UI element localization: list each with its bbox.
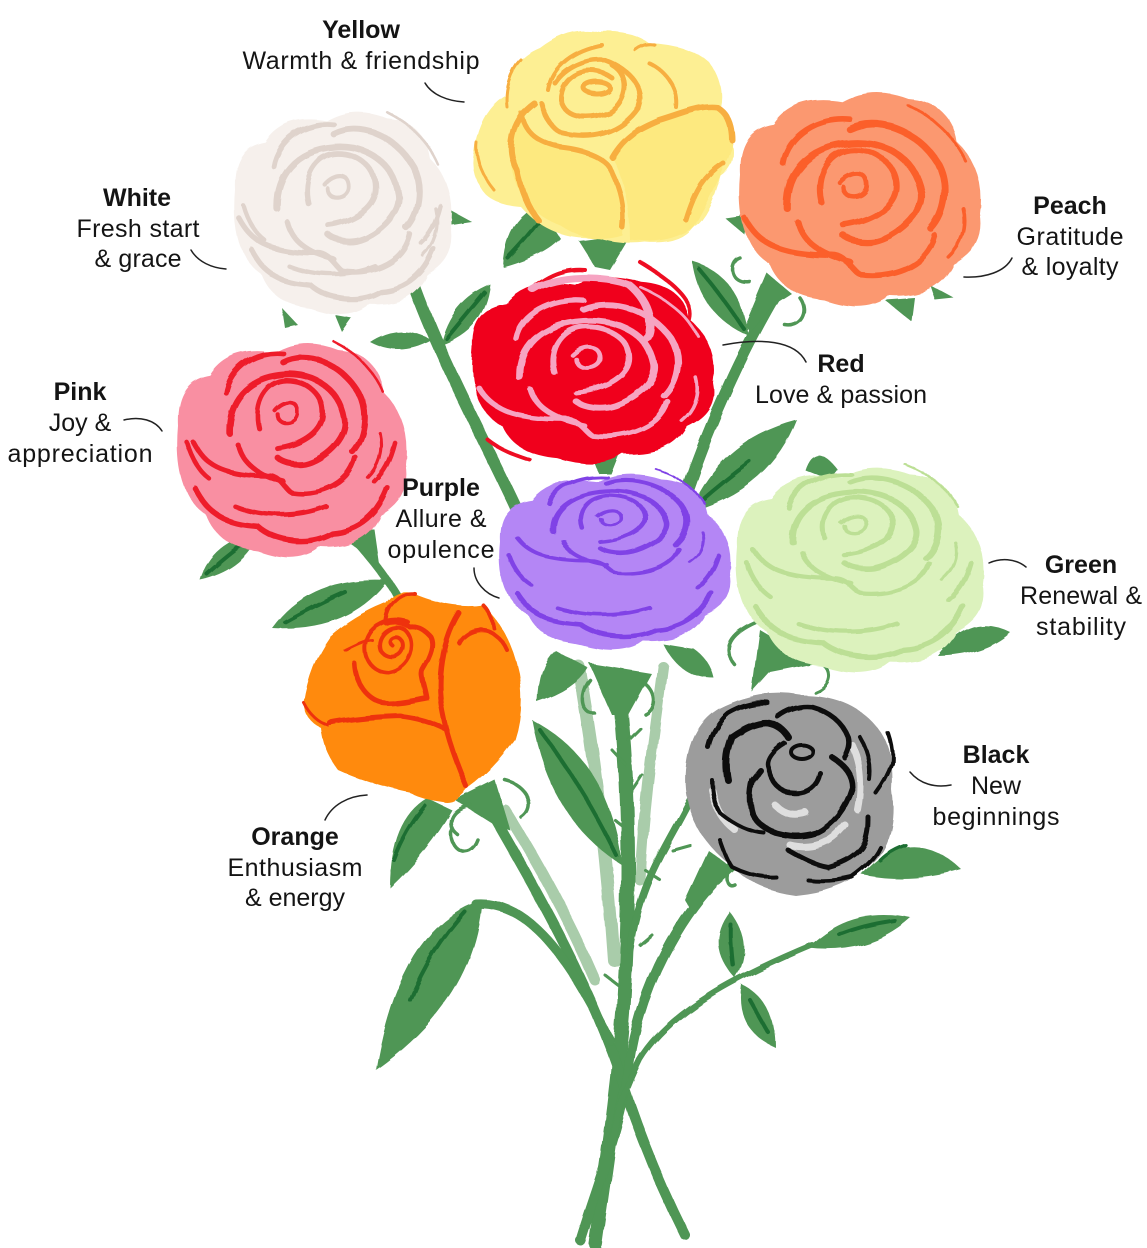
label: pink: [8, 378, 162, 468]
stems: [330, 233, 829, 1243]
label: white: [76, 184, 226, 273]
label: black: [910, 741, 1060, 831]
rose: orange: [304, 592, 521, 802]
label: pink: Joy &: [49, 409, 112, 437]
label: orange: [228, 795, 367, 912]
label: pink: Pink: [54, 378, 106, 406]
rose: red: [472, 262, 714, 464]
label: orange: Enthusiasm: [228, 854, 362, 882]
label: peach: Gratitude: [1016, 223, 1124, 251]
label: orange: & energy: [245, 884, 346, 912]
label: purple: opulence: [388, 536, 494, 564]
rose: green: [736, 464, 984, 672]
label: red: [723, 341, 927, 409]
label: yellow: Yellow: [322, 16, 400, 44]
label: red: Love & passion: [755, 381, 927, 409]
label: green: stability: [1036, 613, 1126, 641]
label: peach: & loyalty: [1022, 253, 1119, 281]
rose: white: [234, 111, 452, 314]
label: red: Red: [817, 350, 865, 378]
label: yellow: Warmth & friendship: [242, 47, 480, 75]
label: peach: Peach: [1033, 192, 1107, 220]
label: green: [989, 551, 1142, 641]
rose: black: [686, 693, 893, 895]
label: white: White: [103, 184, 171, 212]
rose: yellow: [473, 30, 734, 243]
label: black: New: [971, 772, 1022, 800]
label: pink: appreciation: [8, 440, 152, 468]
label: orange: Orange: [251, 823, 339, 851]
rose: peach: [739, 92, 981, 306]
label: green: Green: [1045, 551, 1117, 579]
label: white: & grace: [94, 245, 182, 273]
rose: pink: [177, 341, 407, 557]
label: black: Black: [963, 741, 1029, 769]
label: black: beginnings: [932, 803, 1060, 831]
label: peach: [964, 192, 1124, 281]
label: purple: Purple: [402, 474, 480, 502]
bouquet illustration: [177, 30, 1010, 1243]
rose: purple: [499, 468, 731, 650]
label: purple: Allure &: [396, 505, 487, 533]
label: white: Fresh start: [76, 215, 200, 243]
label: purple: [388, 474, 499, 598]
label: green: Renewal &: [1020, 582, 1142, 610]
label: yellow: [242, 16, 480, 102]
leaves: [200, 175, 1010, 1070]
